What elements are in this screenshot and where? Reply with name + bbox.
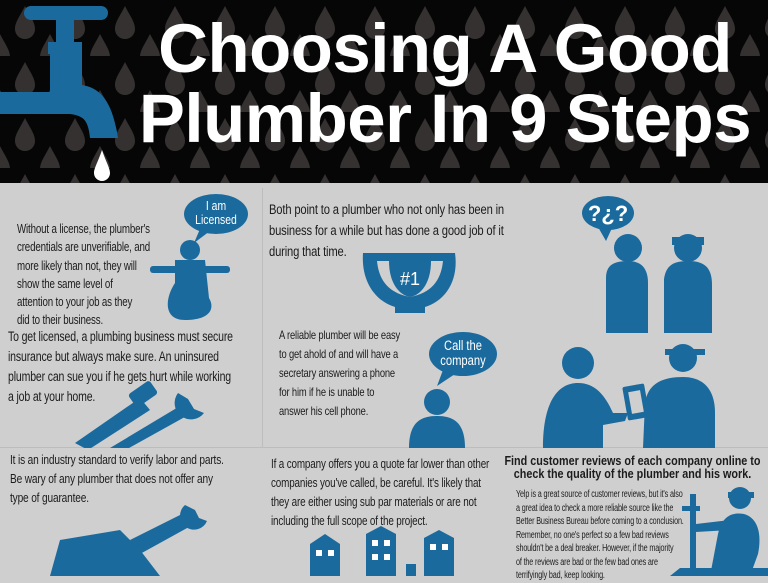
text: experience: during that time. — [269, 244, 347, 259]
icon: man on phone — [409, 389, 465, 448]
header band — [0, 0, 768, 183]
heading: reviews: check the quality of the plumber and his work. — [514, 466, 751, 481]
title: Choosing A Good — [158, 10, 732, 87]
icon: kneeling plumber — [670, 487, 768, 576]
text: reviews: terrifyingly bad, keep looking. — [516, 570, 605, 581]
title — [139, 10, 751, 157]
text: reviews: a great idea to check a more reliable source like the — [516, 502, 673, 514]
text: insurance: a job at your home. — [8, 389, 95, 404]
text: reviews: shouldn't be a deal breaker. However, if the majority — [516, 543, 673, 554]
text: license: more likely than not, they will — [17, 259, 137, 273]
callout: Call the company: Call the — [444, 338, 482, 353]
panel: reviews — [504, 453, 768, 581]
heading: reviews: Find customer reviews of each company online to — [504, 453, 760, 468]
icon: plumber with wrench — [150, 240, 230, 320]
text: insurance: To get licensed, a plumbing business must secure — [8, 329, 233, 344]
text: reachable: secretary answering a phone — [279, 366, 395, 380]
callout: I am Licensed — [184, 194, 248, 242]
icon: trophy #1: #1 — [400, 269, 420, 289]
text: quotes — [271, 456, 490, 528]
title: Plumber In 9 Steps — [139, 80, 751, 157]
text: guarantee: Be wary of any plumber that does not offer any — [10, 471, 213, 486]
callout: Call the company: company — [440, 353, 486, 368]
text: experience: business for a while but has done a good job of it — [269, 223, 504, 238]
text: experience: Both point to a plumber who not only has been in — [269, 202, 504, 217]
dividers — [262, 188, 263, 448]
panel: experience — [269, 202, 504, 313]
text: reviews: of the reviews are bad or the few bad ones are — [516, 556, 658, 568]
callout: I am Licensed: I am — [206, 199, 226, 213]
callout: I am Licensed: Licensed — [195, 213, 237, 227]
text: reviews — [516, 489, 684, 581]
icon: woman and plumber with tablet — [542, 344, 715, 448]
text: quotes: including the full scope of the project. — [271, 513, 428, 528]
text: quotes: they are either using sub par materials or are not — [271, 494, 476, 509]
text: license: credentials are unverifiable, and — [17, 240, 150, 254]
text: quotes: companies you've called, be careful. It's likely that — [271, 475, 481, 490]
text: license: attention to your job as they — [17, 295, 132, 309]
text: reviews: Remember, no one's perfect so a few bad reviews — [516, 530, 669, 540]
text: experience — [269, 202, 504, 259]
text: reviews: Yelp is a great source of customer reviews, but it's also — [516, 489, 683, 500]
icon: trophy #1 — [362, 253, 456, 313]
callout: Call the company — [429, 332, 497, 386]
text: license: did to their business. — [17, 313, 103, 327]
text: insurance: plumber can sue you if he gets hurt while working — [8, 369, 231, 384]
icon: buildings — [310, 526, 454, 576]
text: guarantee: It is an industry standard to verify labor and parts. — [10, 452, 224, 467]
icon: wrenches — [75, 381, 204, 448]
text: reachable: to get ahold of and will have a — [279, 347, 398, 361]
icon: hand with wrench — [50, 505, 207, 576]
text: license — [17, 222, 150, 327]
panel: guarantee — [10, 452, 224, 576]
text: reviews: Better Business Bureau before coming to a conclusion. — [516, 516, 684, 527]
icon: faucet — [0, 6, 118, 181]
panel: questions — [582, 196, 712, 333]
text: license: Without a license, the plumber's — [17, 222, 150, 236]
text: insurance — [8, 329, 233, 404]
text: reachable: for him if he is unable to — [279, 385, 374, 399]
text: reachable — [279, 328, 400, 418]
text: reachable: A reliable plumber will be easy — [279, 328, 400, 342]
text: guarantee — [10, 452, 224, 505]
text: reachable: answer his cell phone. — [279, 404, 368, 418]
panel: quotes — [271, 456, 490, 576]
text: guarantee: type of guarantee. — [10, 490, 89, 505]
panel: reachable — [279, 328, 497, 448]
panel: contract — [542, 344, 715, 448]
icon: two men with question marks — [582, 196, 712, 333]
text: insurance: insurance but always make sure. An uninsured — [8, 349, 219, 364]
heading: reviews — [504, 453, 760, 481]
panel: license — [8, 194, 248, 448]
icon: two men with question marks: ?¿? — [588, 201, 628, 226]
text: quotes: If a company offers you a quote far lower than other — [271, 456, 489, 471]
text: license: show the same level of — [17, 277, 113, 291]
